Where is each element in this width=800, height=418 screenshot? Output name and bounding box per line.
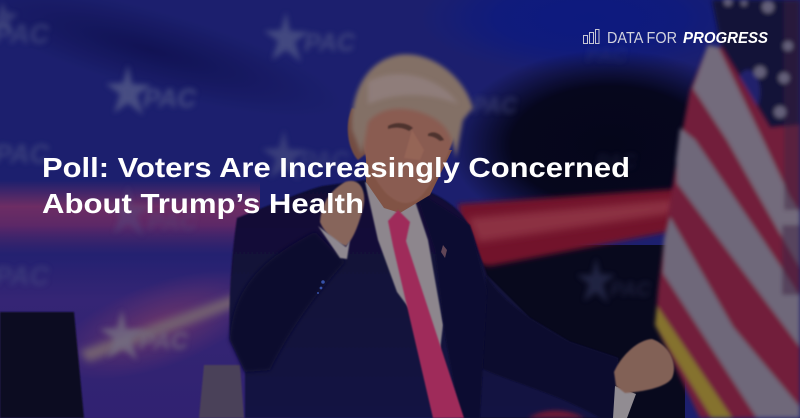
bright blue top right bbox=[420, 0, 760, 76]
logo: Data for Progress: DATA FOR bbox=[607, 30, 677, 47]
eyes and nose shading bbox=[388, 123, 444, 160]
sleeve buttons bbox=[317, 280, 325, 294]
magenta light streak left bbox=[0, 180, 260, 255]
lowered fist right bbox=[614, 339, 674, 393]
title bbox=[42, 152, 630, 219]
title: Poll: Voters Are Increasingly Concerned bbox=[42, 152, 630, 183]
American flag bbox=[655, 0, 800, 418]
lapel pin bbox=[441, 245, 447, 258]
neck bbox=[366, 148, 452, 213]
faded CPAC logos on backdrop: PAC bbox=[596, 151, 637, 173]
flag stripe white 1 bbox=[693, 45, 800, 268]
faded CPAC logos on backdrop: PAC bbox=[139, 328, 189, 355]
shirt cuff bbox=[318, 226, 350, 259]
dark right side bbox=[450, 50, 770, 240]
lit pink at bottom of sleeve bbox=[528, 410, 585, 418]
ear bbox=[348, 108, 368, 160]
flag stars bbox=[724, 0, 793, 118]
magenta glow lower left bbox=[42, 248, 278, 402]
left sleeve shadow bbox=[230, 232, 345, 372]
purple lower left wash bbox=[0, 235, 290, 418]
dark podium / screen lower left bbox=[0, 312, 84, 418]
raised hand left bbox=[320, 181, 364, 246]
faded CPAC logos on backdrop: PAC bbox=[300, 147, 350, 174]
faded CPAC logos on backdrop: PAC bbox=[143, 83, 197, 113]
flag stripe white 3 bbox=[663, 217, 800, 418]
hair bbox=[352, 54, 473, 158]
grey chair lower centre bbox=[199, 365, 244, 418]
gold fringe bbox=[655, 306, 732, 418]
lapel right bbox=[415, 190, 487, 418]
icon: bar chart bbox=[584, 30, 599, 44]
faded CPAC logos on backdrop: PAC bbox=[586, 45, 627, 67]
suit jacket bbox=[229, 180, 618, 418]
title: About Trump’s Health bbox=[42, 188, 364, 219]
faded CPAC logos on backdrop: PAC bbox=[472, 93, 518, 118]
faded CPAC logos on backdrop: PAC bbox=[148, 209, 198, 236]
tie bbox=[388, 210, 464, 418]
face bbox=[361, 89, 462, 203]
faded CPAC logos on backdrop bbox=[0, 2, 651, 360]
logo: Data for Progress: PROGRESS bbox=[683, 30, 769, 47]
faded CPAC logos on backdrop: PAC bbox=[304, 29, 356, 57]
Trump figure bbox=[229, 54, 674, 418]
flag field red bbox=[655, 45, 800, 418]
cuff right bbox=[613, 386, 636, 418]
flag stripe white 2 bbox=[676, 128, 800, 347]
shirt bbox=[365, 182, 443, 350]
hanging fringe right edge bbox=[784, 0, 800, 210]
faded CPAC logos on backdrop: PAC bbox=[610, 279, 651, 301]
logo: Data for Progress bbox=[584, 30, 769, 47]
dark diagonal band upper left bbox=[0, 0, 353, 144]
red light streak right bbox=[458, 188, 688, 266]
flag canton bbox=[712, 0, 800, 135]
right arm shadow bbox=[480, 275, 618, 418]
